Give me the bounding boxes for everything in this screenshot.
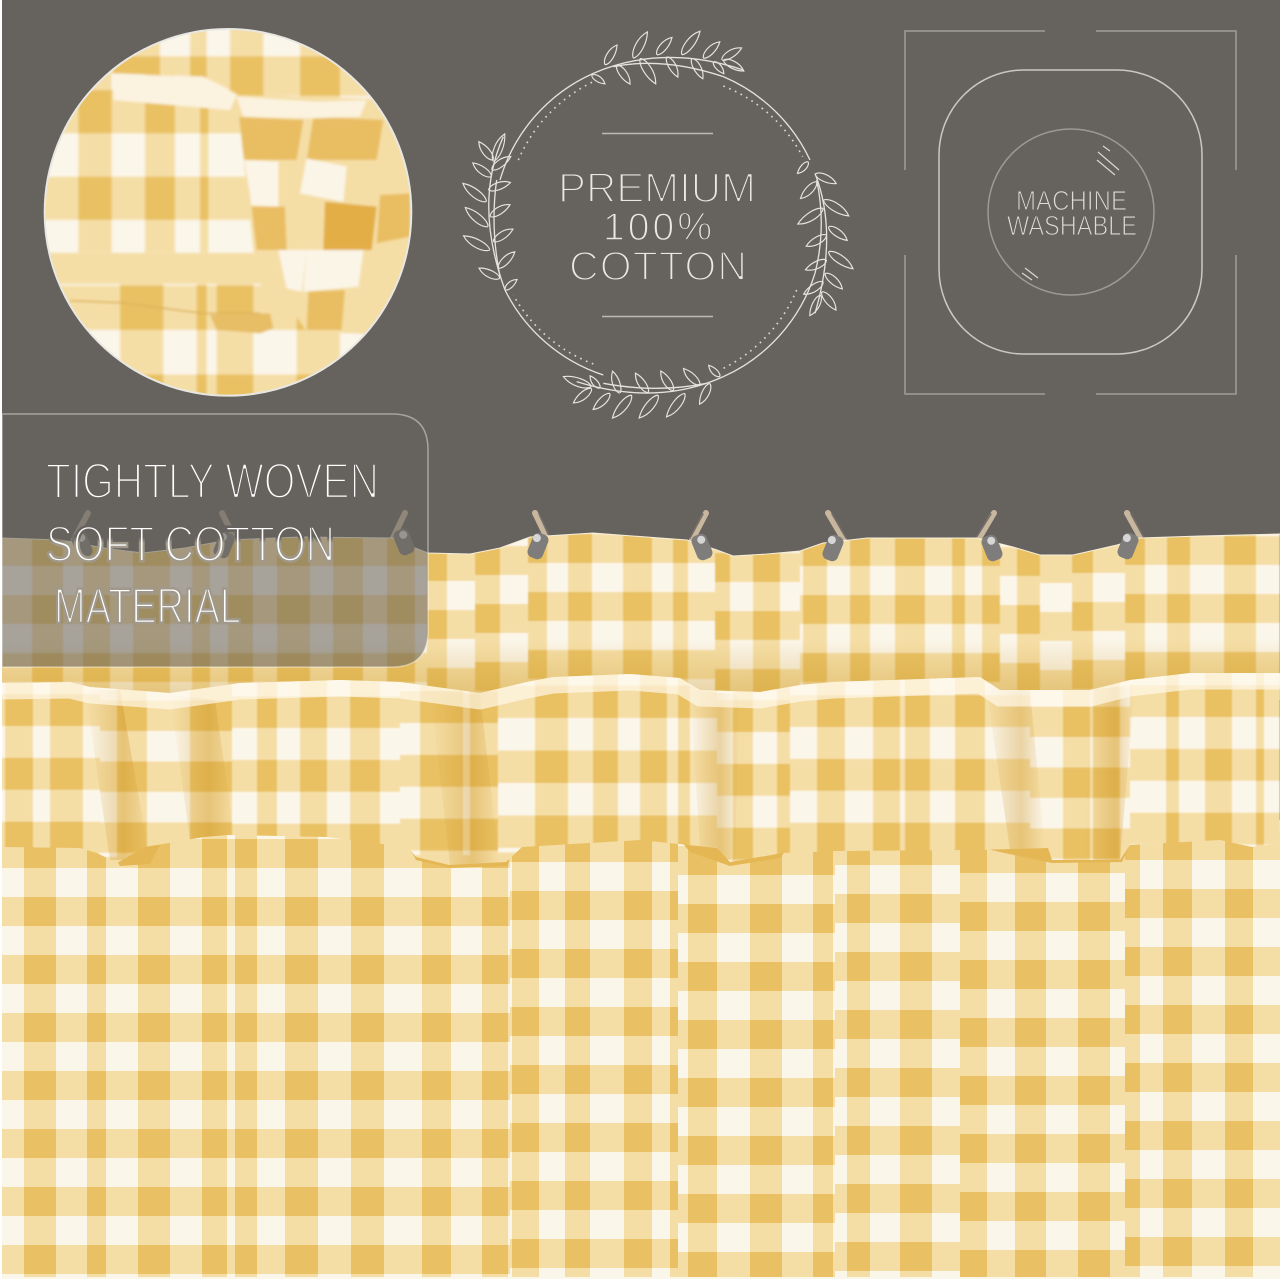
callout text: TIGHTLY WOVEN [46, 453, 379, 509]
wreath [465, 33, 850, 417]
badge: machine washable [905, 31, 1236, 394]
machine washable text: MACHINE [1016, 185, 1127, 216]
badge text: 100% [603, 206, 712, 249]
callout text: MATERIAL [54, 578, 241, 634]
badge text: PREMIUM [558, 164, 756, 211]
lower gingham curtain panel [2, 820, 1280, 1279]
badge: premium 100% cotton wreath [465, 33, 850, 417]
top rule [602, 132, 713, 134]
large leaves [465, 33, 850, 417]
rounded square [939, 70, 1202, 354]
small leaves [505, 62, 808, 388]
machine washable text [1007, 185, 1137, 241]
callout text [46, 453, 379, 634]
bottom rule [602, 316, 713, 318]
inner circle [988, 129, 1154, 295]
badge text: COTTON [569, 243, 747, 289]
dotted inner ring [513, 82, 803, 368]
inset: close-up circle of ruffle [44, 28, 412, 397]
circle border [45, 29, 411, 396]
callout text: SOFT COTTON [46, 516, 335, 572]
curtain hanging rings [72, 513, 1144, 545]
golden under-folds beneath ruffle [108, 840, 1130, 868]
callout: tightly woven soft cotton material [2, 414, 428, 667]
curtain clips [70, 527, 1140, 563]
machine washable text: WASHABLE [1007, 210, 1137, 241]
callout panel [2, 414, 428, 667]
glint marks [1022, 146, 1119, 280]
badge text [558, 164, 756, 289]
gathered ruffle [2, 673, 1280, 865]
medium leaves [473, 37, 847, 409]
upper gingham curtain panel [2, 534, 1280, 700]
ring and stems [489, 57, 827, 393]
corner brackets [905, 31, 1236, 394]
